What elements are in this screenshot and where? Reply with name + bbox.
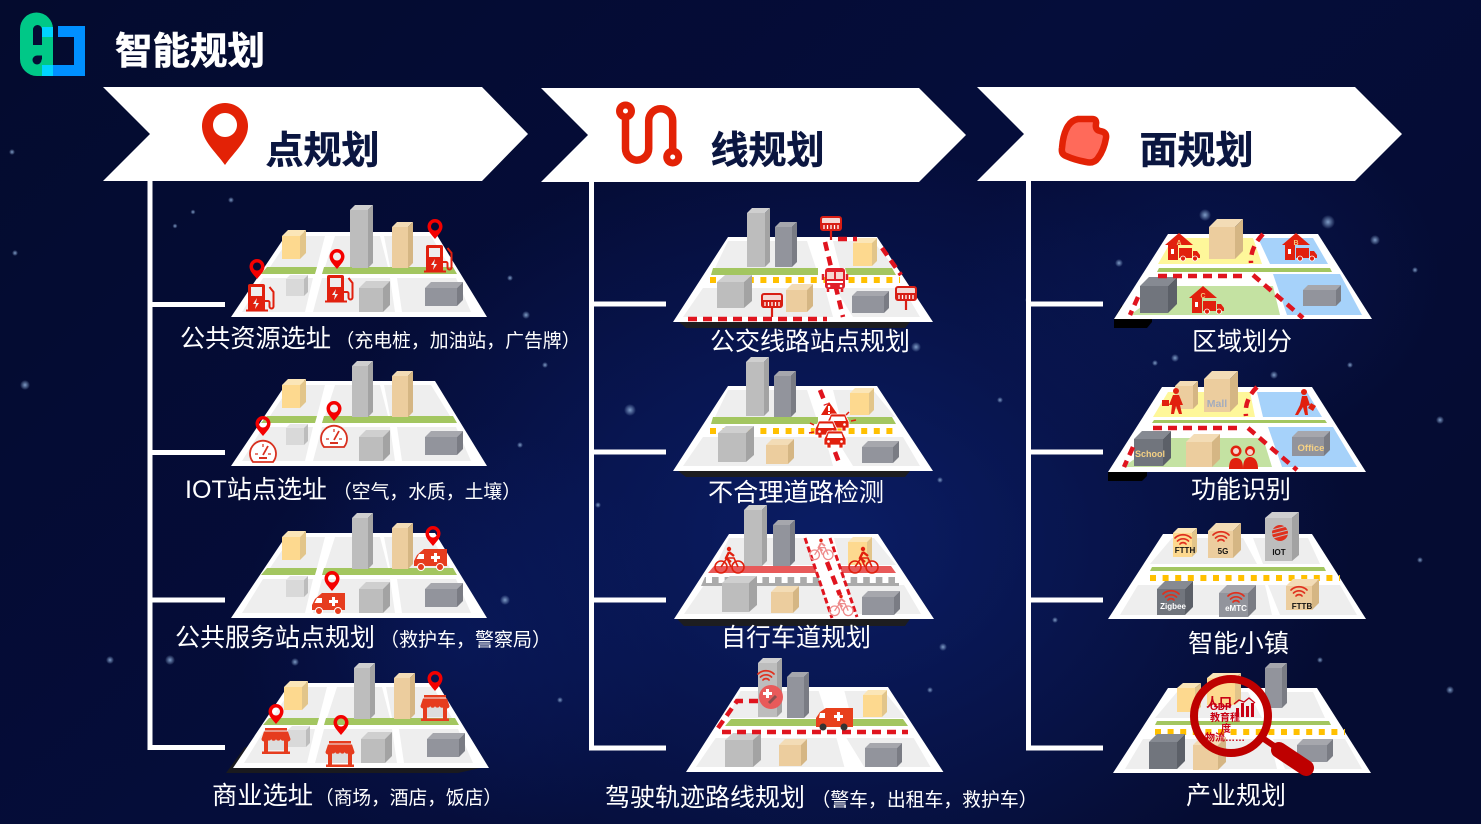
label: smart town: 智能小镇 <box>1188 630 1289 658</box>
icon: FTTH node <box>1175 535 1195 555</box>
icon: 5G node <box>1213 532 1229 556</box>
icon: Zigbee node: Zigbee <box>1160 602 1186 611</box>
note: ambulance, police: （救护车，警察局） <box>380 629 551 651</box>
map: smart town <box>1108 512 1366 619</box>
magnifier data text: 人口 <box>1206 695 1232 710</box>
note: police cars, taxis, ambulances: （警车，出租车，救护车） <box>812 789 1038 811</box>
icon: magnifier with industry data <box>1194 679 1306 768</box>
map: bike lane planning <box>674 505 934 626</box>
banner: area planning <box>977 87 1402 181</box>
heading: line planning: 线规划 <box>710 130 824 172</box>
building tags <box>1135 398 1324 459</box>
connector tree <box>150 181 225 748</box>
building tags: Mall <box>1207 398 1227 410</box>
note: charging piles, gas stations, billboards: （充电桩，加油站，广告牌） <box>336 330 580 352</box>
icon: warehouse B <box>1282 233 1317 261</box>
icon: students couple <box>1229 446 1258 469</box>
icon: IOT node: IOT <box>1272 548 1286 557</box>
icon: eMTC node: eMTC <box>1225 604 1247 613</box>
icon: FTTB node <box>1291 587 1312 611</box>
magnifier data text: 物流…… <box>1205 731 1245 744</box>
title: 智能规划 <box>115 30 265 72</box>
banner: point planning <box>103 87 528 181</box>
icon: area blob <box>1062 119 1106 162</box>
map: unreasonable road detection <box>673 357 933 477</box>
map: industry planning <box>1113 663 1371 773</box>
icon: 5G node: 5G <box>1218 547 1228 556</box>
icon: commuting man <box>1295 389 1316 415</box>
icon: warehouse A: A <box>1176 240 1182 247</box>
map: zoning <box>1114 219 1372 328</box>
label: commercial siting: 商业选址 <box>212 782 313 810</box>
map: public service sites <box>231 513 487 618</box>
connector tree <box>592 182 666 748</box>
icon: FTTB node: FTTB <box>1292 602 1312 611</box>
icon: warehouse B: B <box>1293 240 1299 247</box>
icon: eMTC node <box>1225 593 1247 613</box>
map: public resource siting <box>231 205 487 317</box>
magnifier data text: 度 <box>1221 722 1231 735</box>
map: driving trajectory planning <box>686 658 943 772</box>
icon: warehouse C: C <box>1200 293 1206 300</box>
magnifier data text: 教育程 <box>1210 711 1240 724</box>
map: commercial siting <box>226 663 489 773</box>
label: public service sites: 公共服务站点规划 <box>175 624 375 652</box>
magnifier data text <box>1205 695 1245 744</box>
label: industry planning: 产业规划 <box>1186 782 1286 810</box>
banner: line planning <box>541 88 966 182</box>
magnifier data text: GDP <box>1210 702 1232 713</box>
connector tree <box>1028 181 1103 748</box>
label: public resource siting: 公共资源选址 <box>180 325 331 353</box>
icon: Zigbee node <box>1160 591 1186 611</box>
map: bus route and stops <box>673 208 933 328</box>
icon: winding route <box>616 102 682 166</box>
icon: IOT node <box>1272 525 1288 557</box>
building tags: School <box>1135 449 1165 459</box>
logo <box>20 12 85 76</box>
map: function identification <box>1108 371 1366 481</box>
column 1: point planning <box>103 87 580 810</box>
icon: ambulance <box>816 708 853 730</box>
heading: area planning: 面规划 <box>1140 130 1254 172</box>
building tags: Office <box>1298 443 1324 454</box>
icon: wifi and emergency call <box>758 671 783 709</box>
note: air, water, soil: （空气，水质，土壤） <box>333 481 521 503</box>
icon: traffic warning <box>809 402 856 448</box>
label: unreasonable road detection: 不合理道路检测 <box>708 479 884 507</box>
heading: point planning: 点规划 <box>266 130 380 172</box>
label: bike lane planning: 自行车道规划 <box>721 624 871 652</box>
column 2: line planning <box>541 88 1038 812</box>
column 3: area planning <box>977 87 1402 810</box>
icon: warehouse C <box>1189 286 1224 314</box>
icon: shopping woman <box>1162 388 1183 414</box>
icon: FTTH node: FTTH <box>1175 546 1195 555</box>
map: IOT station siting <box>231 361 487 466</box>
icon: location pin <box>202 103 248 165</box>
label: IOT station siting: IOT站点选址 <box>185 476 327 504</box>
label: function identification: 功能识别 <box>1191 476 1291 504</box>
icon: warehouse A <box>1165 233 1200 261</box>
label: zoning: 区域划分 <box>1192 328 1292 356</box>
mini chart in magnifier <box>1234 698 1255 717</box>
label: driving trajectory planning: 驾驶轨迹路线规划 <box>605 784 805 812</box>
label: bus route and stops: 公交线路站点规划 <box>710 328 910 356</box>
note: malls, hotels, restaurants: （商场，酒店，饭店） <box>315 787 502 809</box>
